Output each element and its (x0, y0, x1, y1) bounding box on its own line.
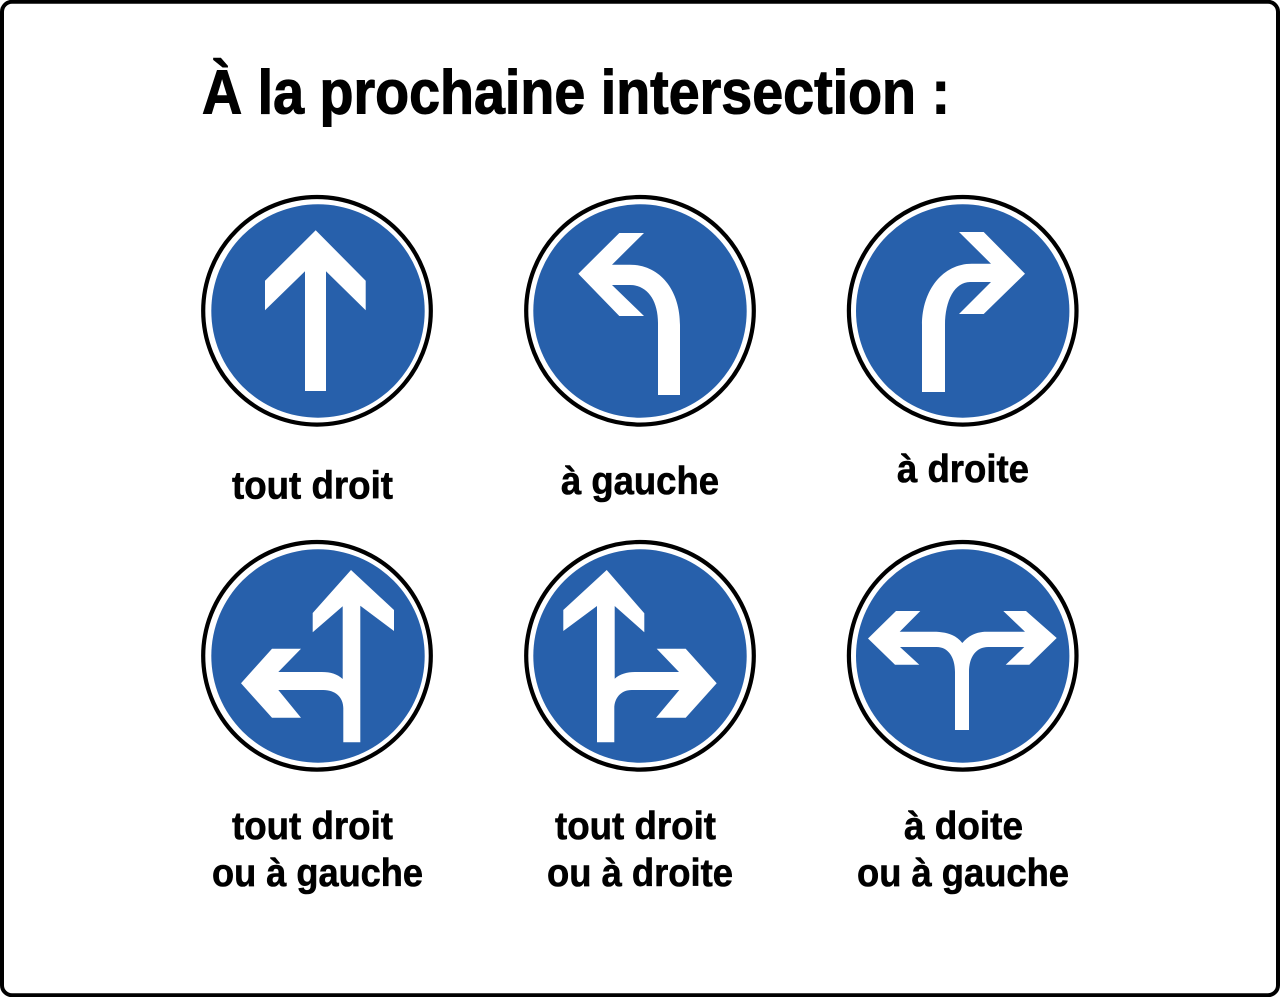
label: tout droit ou à droite: tout droit (555, 805, 716, 848)
icon: straight ahead sign (203, 197, 431, 425)
label: à doite ou à gauche: ou à gauche (857, 852, 1069, 895)
icon: straight or left sign (203, 542, 431, 770)
label: à gauche: à gauche (561, 460, 719, 503)
panel: tout droit ou à gauche (203, 542, 431, 895)
icon: straight or right sign (526, 542, 754, 770)
title: À la prochaine intersection : (202, 58, 950, 128)
panel: à doite ou à gauche (849, 542, 1076, 895)
icon: turn left sign (526, 197, 754, 425)
label: tout droit ou à gauche (212, 805, 423, 895)
label: tout droit ou à gauche: ou à gauche (212, 852, 423, 895)
panel: tout droit (203, 197, 431, 507)
panel: à gauche (526, 197, 754, 503)
panel: à droite (849, 197, 1076, 491)
label: tout droit ou à droite: ou à droite (547, 852, 733, 895)
icon: left or right sign (849, 542, 1076, 770)
label: à doite ou à gauche: à doite (904, 805, 1023, 848)
label: tout droit: tout droit (232, 464, 393, 508)
label: à doite ou à gauche (857, 805, 1069, 895)
label: tout droit ou à droite (547, 805, 733, 895)
panel: tout droit ou à droite (526, 542, 754, 895)
label: tout droit ou à gauche: tout droit (232, 805, 393, 848)
label: à droite: à droite (897, 448, 1029, 491)
icon: turn right sign (849, 197, 1076, 425)
